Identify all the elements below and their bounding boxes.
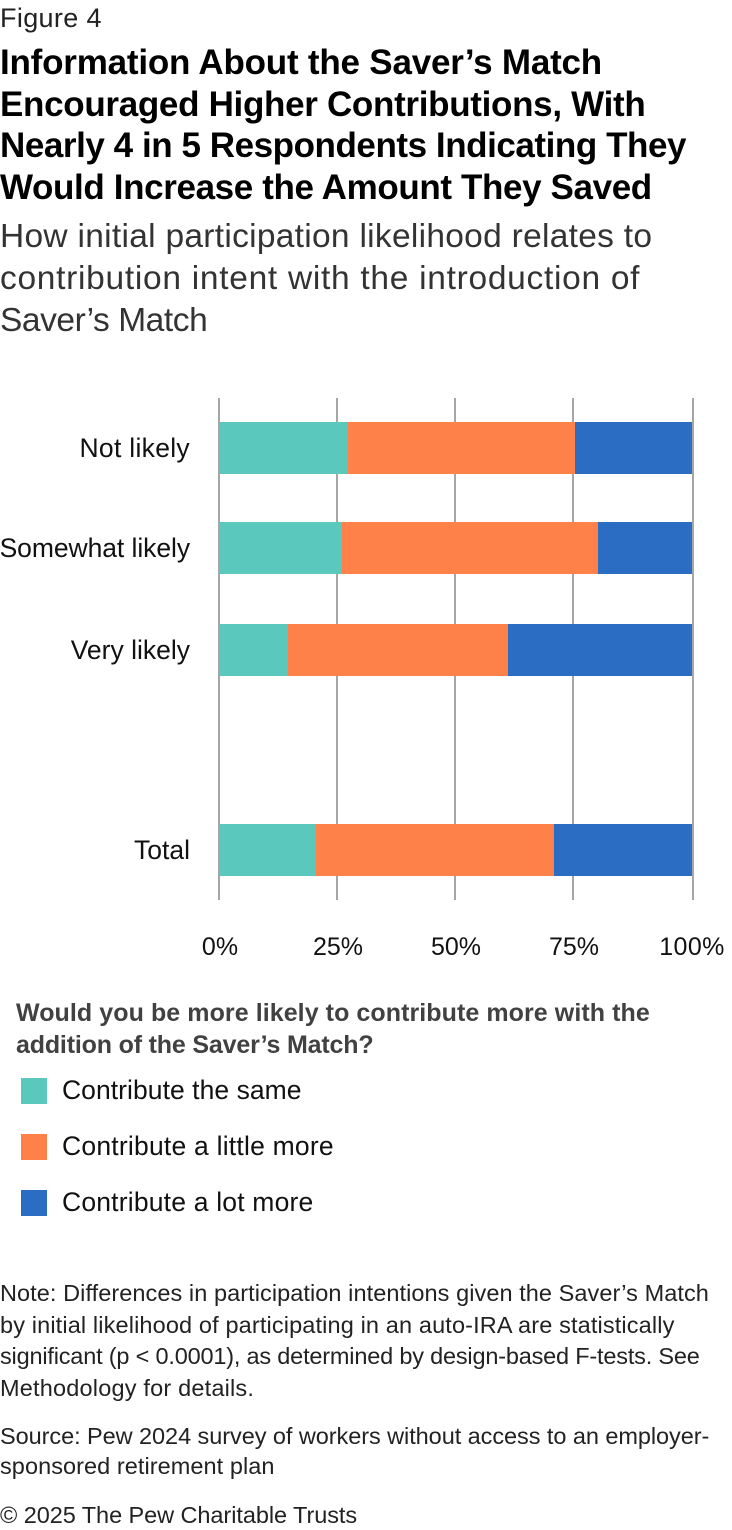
legend title: addition of the Saver’s Match? <box>16 1031 373 1059</box>
title: Encouraged Higher Contributions, With <box>0 84 645 124</box>
axis labels: 25% <box>313 933 363 961</box>
source: sponsored retirement plan <box>0 1453 275 1479</box>
stacked bar chart <box>0 398 725 961</box>
bar: Very likely <box>220 624 692 676</box>
note: Methodology for details. <box>0 1374 254 1400</box>
subtitle: Saver’s Match <box>0 302 207 339</box>
category labels: Total <box>134 835 190 865</box>
legend title: Would you be more likely to contribute more with the <box>16 999 650 1027</box>
bar: Total <box>220 824 692 876</box>
axis labels: 50% <box>431 933 481 961</box>
figure label: Figure 4 <box>0 3 102 33</box>
note: by initial likelihood of participating in an auto-IRA are statistically <box>0 1312 674 1338</box>
subtitle <box>0 218 652 339</box>
legend item: lot more: Contribute a lot more <box>62 1187 313 1217</box>
source: Source: Pew 2024 survey of workers without access to an employer- <box>0 1423 709 1449</box>
title: Nearly 4 in 5 Respondents Indicating They <box>0 126 686 165</box>
axis labels: 0% <box>202 933 238 961</box>
bar: Not likely <box>220 422 692 474</box>
legend title <box>16 999 650 1059</box>
note <box>0 1280 709 1401</box>
axis labels <box>202 933 725 961</box>
category labels <box>0 433 191 865</box>
subtitle: contribution intent with the introduction of <box>0 260 640 297</box>
note: significant (p < 0.0001), as determined by design-based F-tests. See <box>0 1343 700 1369</box>
title: Would Increase the Amount They Saved <box>0 168 652 206</box>
legend item: little more: Contribute a little more <box>62 1131 334 1161</box>
legend <box>16 999 650 1217</box>
axis labels: 100% <box>659 933 725 961</box>
title: Information About the Saver’s Match <box>0 43 602 82</box>
source <box>0 1423 709 1479</box>
copyright: © 2025 The Pew Charitable Trusts <box>0 1502 357 1528</box>
legend item: same: Contribute the same <box>62 1075 302 1105</box>
category labels: Very likely <box>71 635 191 665</box>
axis labels: 75% <box>549 933 599 961</box>
category labels: Somewhat likely <box>0 533 191 563</box>
category labels: Not likely <box>79 433 190 463</box>
bar: Somewhat likely <box>220 522 692 574</box>
title <box>0 43 686 206</box>
subtitle: How initial participation likelihood relates to <box>0 218 652 255</box>
note: Note: Differences in participation intentions given the Saver’s Match <box>0 1280 709 1306</box>
